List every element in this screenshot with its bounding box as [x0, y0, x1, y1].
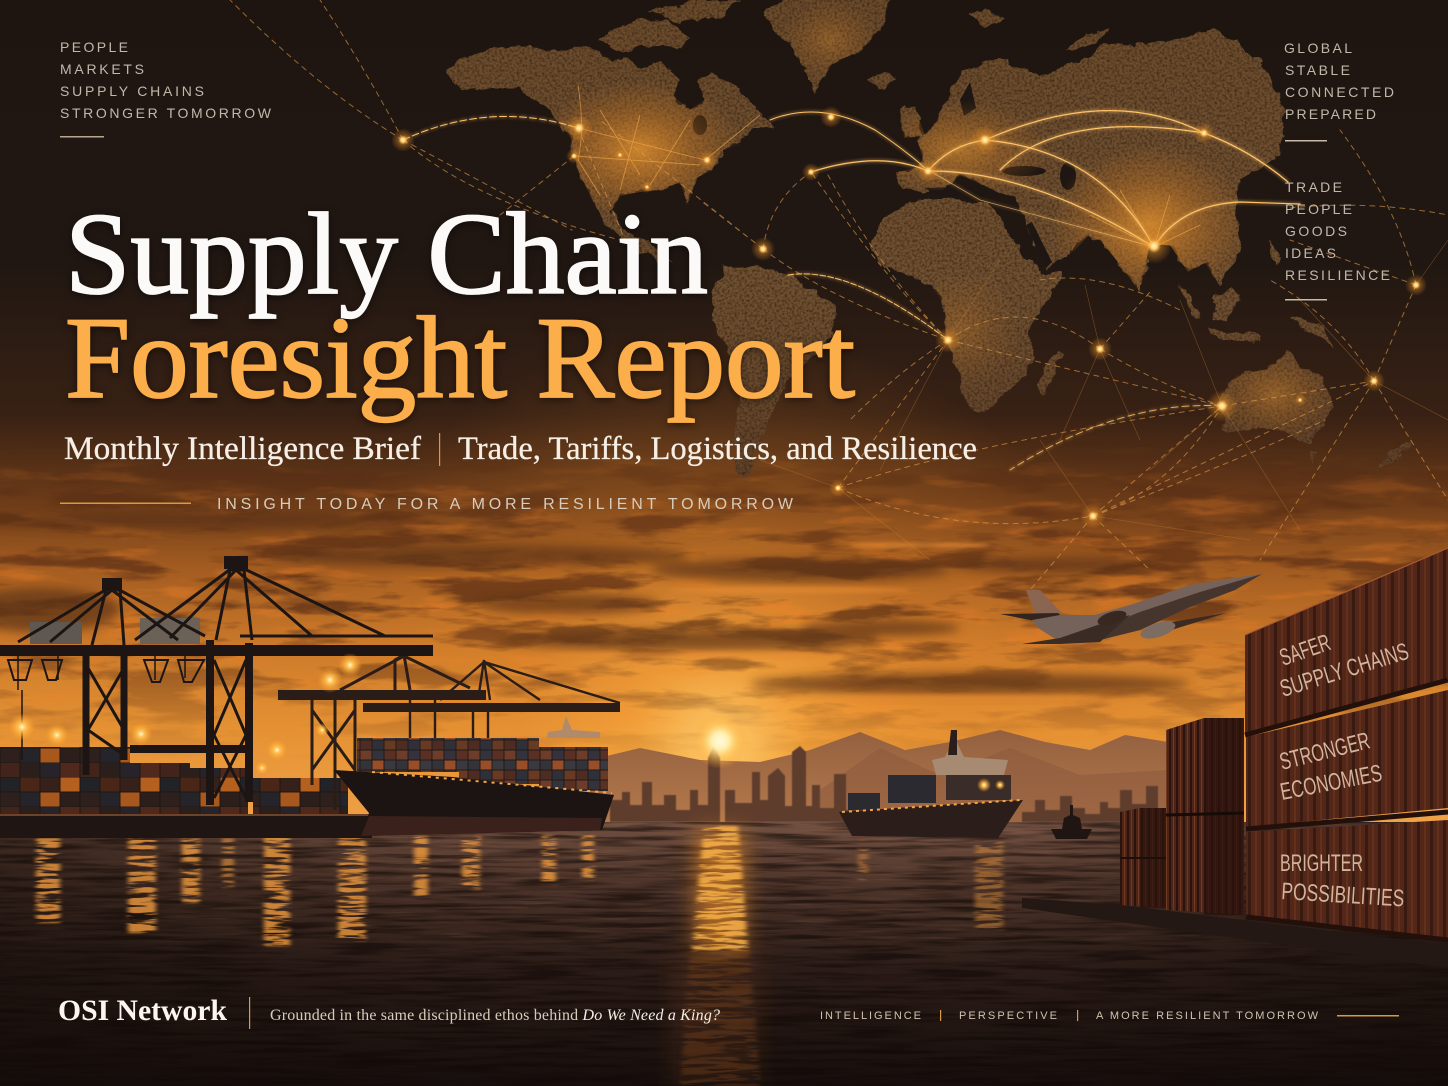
- dashed routes: [230, 0, 1448, 590]
- right keyword list: GOODS: [1285, 223, 1347, 239]
- ship hull: [839, 800, 1023, 838]
- top-left keyword list: [60, 39, 272, 138]
- footer keywords: INTELLIGENCE: [820, 1010, 921, 1022]
- container text: SAFER: [1276, 629, 1334, 672]
- right keyword list: TRADE: [1285, 179, 1342, 195]
- background sky: [0, 0, 1448, 830]
- footer brand: [58, 994, 720, 1029]
- container text: POSSIBILITIES: [1281, 878, 1405, 912]
- distant mountains: [590, 730, 1168, 825]
- subtitle: [64, 431, 977, 467]
- crane 1: [0, 578, 433, 775]
- top-left keyword list: STRONGER TOMORROW: [60, 105, 272, 121]
- solid lit arcs: [403, 111, 1300, 470]
- container stacks: [0, 747, 348, 815]
- top-left keyword list: PEOPLE: [60, 39, 128, 55]
- crane 2: [130, 556, 433, 805]
- right keyword list: RESILIENCE: [1285, 267, 1390, 283]
- dock lamps: [8, 653, 362, 775]
- footer brand: OSI Network: [58, 994, 227, 1027]
- container bottom: [1246, 820, 1448, 940]
- top-left keyword list: MARKETS: [60, 61, 144, 77]
- sun reflection: [670, 826, 760, 1086]
- quay wall: [0, 815, 372, 838]
- trade route network: [230, 0, 1448, 590]
- ship hull: [334, 770, 614, 836]
- tugboat: [1051, 805, 1092, 839]
- lit regions on the map: [535, 0, 1335, 440]
- ship cargo: [357, 738, 608, 791]
- port: quay and container yard: [0, 747, 372, 838]
- right keyword list: IDEAS: [1285, 245, 1336, 261]
- title: [65, 190, 855, 423]
- sun: [692, 713, 748, 769]
- top-right keyword list: STABLE: [1285, 62, 1350, 78]
- container text: BRIGHTER: [1280, 850, 1363, 877]
- dock foreground: [1022, 898, 1448, 968]
- footer keywords: [820, 1010, 1399, 1022]
- crane 4: [363, 660, 620, 745]
- thin spokes: [760, 240, 1448, 560]
- stabilizer: [1000, 613, 1066, 622]
- dock light reflections: [36, 835, 1003, 946]
- container text: STRONGER: [1277, 727, 1373, 776]
- subtitle: Monthly Intelligence Brief: [64, 431, 421, 467]
- top-right keyword list: PREPARED: [1285, 106, 1376, 122]
- sun glow: [0, 300, 1448, 830]
- route nodes: [391, 106, 1427, 529]
- world map: [448, 0, 1412, 478]
- subtitle: Trade, Tariffs, Logistics, and Resilience: [458, 431, 977, 467]
- airplane: [1000, 574, 1262, 644]
- fuselage: [1032, 574, 1262, 642]
- cloud bands: [0, 440, 1448, 760]
- right keyword list: PEOPLE: [1285, 201, 1352, 217]
- ship superstructure: [932, 730, 1008, 775]
- far wing: [1140, 613, 1226, 635]
- near wing: [1022, 615, 1130, 644]
- tagline: INSIGHT TODAY FOR A MORE RESILIENT TOMORROW: [217, 496, 794, 513]
- water: [0, 822, 1448, 1086]
- container stack middle: [1166, 718, 1244, 915]
- container ship distant: [839, 730, 1023, 838]
- container middle: [1246, 690, 1448, 827]
- engines: [1096, 608, 1128, 628]
- footer keywords: PERSPECTIVE: [959, 1010, 1057, 1022]
- continents: [448, 0, 1412, 478]
- top-right keyword list: CONNECTED: [1285, 84, 1394, 100]
- container stack small: [1120, 808, 1166, 908]
- container top: [1245, 548, 1448, 733]
- ship bridge: [547, 716, 600, 738]
- footer brand: Grounded in the same disciplined ethos behind Do We Need a King?: [270, 1007, 720, 1024]
- container stack large: [1245, 548, 1448, 940]
- container text: ECONOMIES: [1278, 760, 1384, 806]
- top-right keyword list: [1284, 40, 1394, 142]
- container ship large: [334, 716, 614, 836]
- city skyline: [610, 745, 1158, 822]
- tail fin: [1026, 590, 1062, 620]
- top-left keyword list: SUPPLY CHAINS: [60, 83, 204, 99]
- top-right keyword list: GLOBAL: [1284, 40, 1352, 56]
- far cranes: [278, 655, 620, 810]
- ship cargo: [848, 775, 1011, 810]
- container text: [1276, 629, 1412, 912]
- title line 2: Foresight Report: [65, 294, 855, 423]
- footer keywords: A MORE RESILIENT TOMORROW: [1096, 1010, 1319, 1022]
- title line 1: Supply Chain: [65, 190, 708, 319]
- crane 3: [278, 655, 486, 810]
- near cranes: [0, 556, 433, 805]
- right keyword list: [1285, 179, 1390, 300]
- inland seas: [693, 82, 1076, 268]
